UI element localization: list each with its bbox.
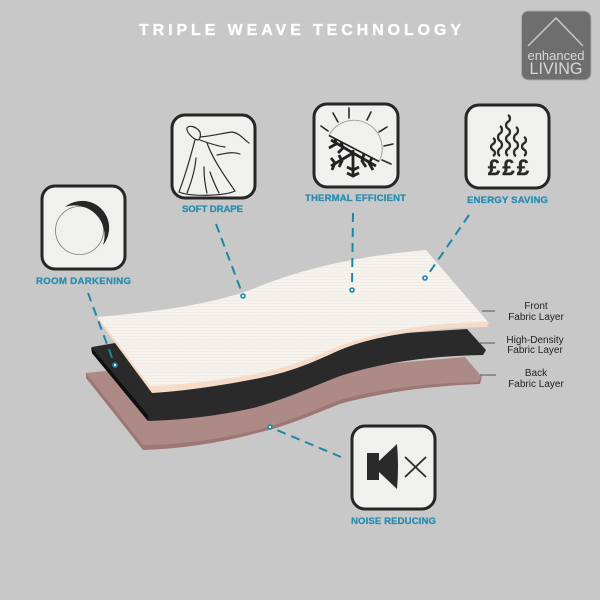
label: SOFT DRAPE: [182, 204, 244, 215]
logo: enhanced living: [522, 11, 591, 80]
layer label leader lines: [480, 311, 496, 375]
high-density fabric layer: [91, 329, 486, 421]
icon: moon: [56, 201, 109, 254]
front fabric layer: [98, 250, 489, 393]
label: ROOM DARKENING: [36, 276, 131, 287]
panel: energy saving: [466, 105, 549, 206]
connector: thermal efficient: [350, 213, 354, 292]
connector: room darkening: [88, 293, 117, 367]
panel: noise reducing: [351, 426, 436, 527]
label: ENERGY SAVING: [467, 195, 548, 206]
icon: muted speaker: [367, 444, 426, 489]
panel: soft drape: [172, 115, 255, 215]
title: TRIPLE WEAVE TECHNOLOGY: [139, 22, 461, 39]
icon: hand holding fabric: [179, 126, 249, 195]
connector: energy saving: [423, 215, 469, 280]
logo: enhanced living: LIVING: [530, 60, 582, 78]
connector: noise reducing: [268, 425, 341, 457]
label: THERMAL EFFICIENT: [305, 193, 406, 204]
label: back fabric layer: Fabric Layer: [508, 379, 564, 390]
icon: sun and snowflake: [321, 108, 393, 177]
panel: room darkening: [36, 186, 131, 287]
label: NOISE REDUCING: [351, 516, 436, 527]
logo: enhanced living: enhanced: [528, 48, 584, 63]
connector: soft drape: [216, 224, 245, 298]
panel: thermal efficient: [305, 104, 406, 204]
label: high-density fabric layer: Fabric Layer: [507, 345, 563, 356]
label: front fabric layer: Fabric Layer: [508, 312, 564, 323]
back fabric layer: [86, 357, 482, 450]
label: front fabric layer: Front: [524, 301, 548, 312]
fabric layers: [86, 250, 489, 450]
icon: heat and pounds: £££: [488, 155, 530, 180]
label: high-density fabric layer: High-Density: [506, 335, 564, 346]
label: back fabric layer: Back: [525, 368, 548, 379]
